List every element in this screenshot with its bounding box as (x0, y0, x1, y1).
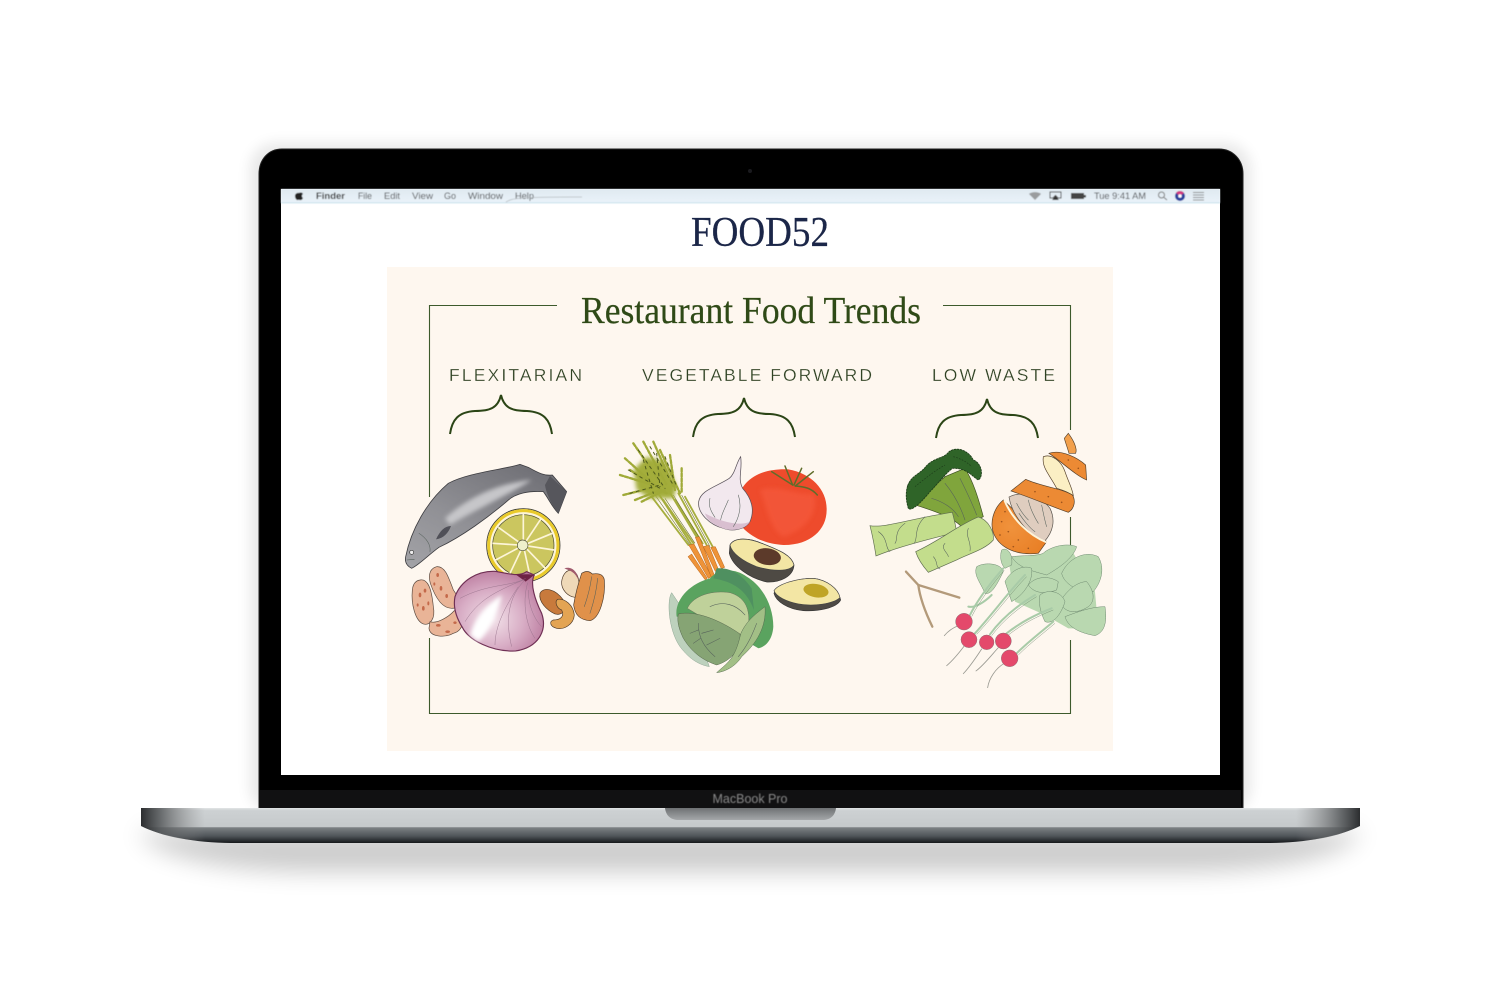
menu bar: Window (468, 191, 503, 201)
radishes (944, 626, 1004, 688)
panel: restaurant food trends (387, 267, 1113, 751)
garlic (699, 457, 752, 530)
radish stems (968, 568, 1053, 653)
brace (936, 399, 1038, 438)
illustration (405, 464, 605, 651)
orange (992, 494, 1053, 554)
menu bar: File (358, 191, 372, 201)
label: VEGETABLE FORWARD (642, 365, 872, 385)
menu bar (281, 189, 1220, 203)
menu bar: Help (515, 191, 534, 201)
laptop mockup (138, 143, 1362, 872)
column: flexitarian (405, 365, 605, 651)
carrots (688, 537, 725, 580)
status icons (1029, 191, 1204, 201)
apple icon (295, 192, 303, 200)
wishbone (906, 572, 959, 627)
orange peel (1011, 433, 1087, 512)
cabbage (669, 568, 773, 673)
title: Restaurant Food Trends (581, 290, 921, 332)
camera (748, 169, 752, 173)
menu bar: Go (444, 191, 456, 201)
brace (693, 398, 795, 437)
screen (281, 189, 1220, 775)
laptop lid (259, 149, 1243, 808)
status icons: Tue 9:41 AM (1094, 191, 1146, 201)
broccoli stalks (870, 512, 993, 572)
column: vegetable forward (620, 365, 872, 673)
nuts (540, 568, 605, 629)
menu bar: Edit (384, 191, 400, 201)
lid shadow (250, 143, 1251, 813)
brace (450, 395, 552, 434)
broccoli (906, 449, 983, 527)
fish (405, 464, 567, 568)
menu bar: View (412, 191, 433, 201)
menu bar: Finder (316, 191, 345, 201)
label: LOW WASTE (932, 365, 1055, 385)
frame (430, 306, 1070, 714)
logo: FOOD52 (691, 210, 829, 256)
onion (454, 571, 543, 651)
beans (412, 567, 462, 636)
column: low waste (870, 365, 1106, 688)
laptop base (141, 808, 1360, 843)
label: FLEXITARIAN (449, 365, 582, 385)
carrot tops (620, 442, 713, 547)
notch (665, 808, 836, 820)
avocado: pit half (729, 539, 794, 582)
illustration (620, 442, 841, 673)
model name: MacBook Pro (712, 792, 788, 806)
base shadow (138, 832, 1362, 872)
lemon (487, 509, 560, 582)
radish leaves (976, 545, 1106, 636)
avocado: half (774, 578, 841, 611)
tomato (737, 466, 827, 545)
illustration (870, 433, 1106, 688)
hinge band (260, 790, 1241, 808)
